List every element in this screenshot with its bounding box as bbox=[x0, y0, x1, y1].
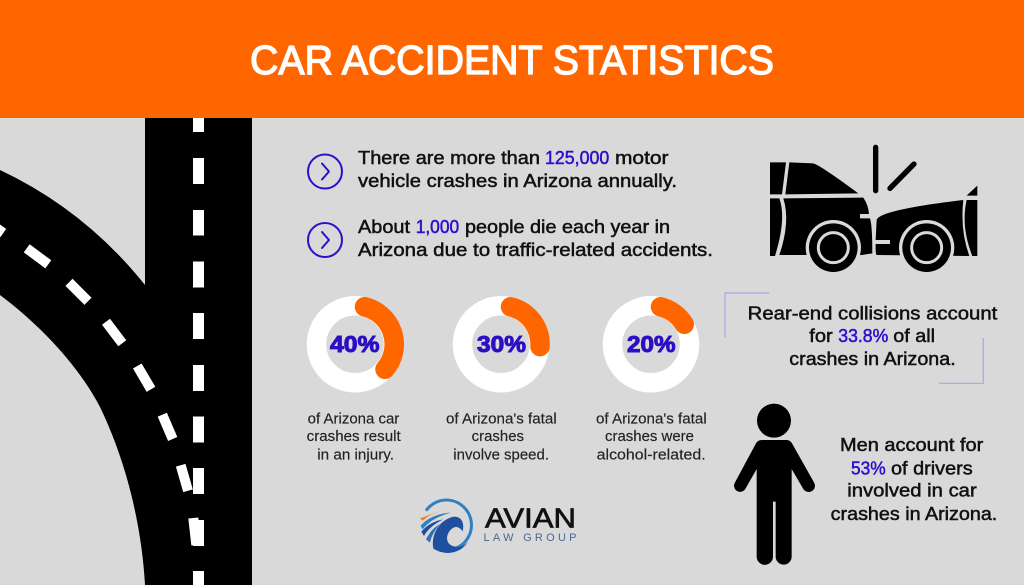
icon: chevron circle bbox=[308, 154, 342, 188]
callout: rear-end collisions: for bbox=[809, 325, 833, 346]
caption: of Arizona's fatal bbox=[596, 411, 707, 427]
logo: Avian Law Group: LAW GROUP bbox=[484, 532, 576, 544]
caption bbox=[596, 411, 707, 463]
fact: annual deaths bbox=[308, 216, 713, 260]
fact: annual crashes bbox=[308, 147, 677, 191]
caption: crashes were bbox=[605, 429, 694, 445]
caption: crashes bbox=[472, 429, 524, 445]
fact: annual deaths: 1,000 bbox=[416, 216, 459, 237]
callout: men drivers: 53% bbox=[851, 457, 886, 478]
caption: in an injury. bbox=[317, 447, 394, 463]
donut stat: 20%: 20% bbox=[627, 331, 676, 357]
callout: rear-end collisions: Rear-end collisions account bbox=[748, 302, 997, 324]
fact: annual deaths: people die each year in bbox=[465, 216, 670, 237]
donut stat: 30% bbox=[446, 306, 557, 463]
callout: men drivers: of drivers bbox=[891, 457, 973, 478]
callout: rear-end collisions: of all bbox=[893, 325, 935, 346]
callout: rear-end collisions: 33.8% bbox=[838, 325, 888, 346]
caption: crashes result bbox=[307, 429, 401, 445]
fact: annual deaths: About bbox=[358, 216, 410, 237]
callout: men drivers: involved in car bbox=[847, 480, 977, 501]
callout: men drivers: Men account for bbox=[840, 434, 983, 455]
caption: alcohol-related. bbox=[597, 447, 706, 463]
caption: of Arizona car bbox=[308, 411, 400, 427]
callout: men drivers bbox=[831, 434, 997, 524]
fact: annual crashes: 125,000 bbox=[545, 147, 609, 168]
icon: person bbox=[734, 404, 815, 565]
donut stat: 20% bbox=[596, 306, 707, 463]
icon: chevron circle bbox=[308, 223, 342, 257]
caption: of Arizona's fatal bbox=[446, 411, 557, 427]
logo: Avian Law Group: AVIAN bbox=[485, 502, 576, 534]
fact: annual crashes: vehicle crashes in Arizona annually. bbox=[358, 170, 677, 191]
donut stat: 30%: 30% bbox=[477, 331, 526, 357]
header banner bbox=[0, 0, 1024, 118]
road illustration bbox=[0, 118, 252, 585]
donut stat: 40%: 40% bbox=[330, 331, 380, 357]
callout: men drivers: crashes in Arizona. bbox=[831, 503, 997, 524]
fact: annual deaths: Arizona due to traffic-related accidents. bbox=[358, 239, 713, 260]
callout: rear-end collisions: crashes in Arizona. bbox=[789, 348, 956, 369]
caption bbox=[446, 411, 557, 463]
fact: annual crashes: motor bbox=[615, 147, 668, 168]
callout: rear-end collisions bbox=[725, 293, 997, 383]
icon: eagle emblem bbox=[420, 500, 471, 553]
donut stat: 40% bbox=[307, 306, 401, 463]
icon: car crash bbox=[770, 147, 977, 276]
title: CAR ACCIDENT STATISTICS bbox=[250, 37, 774, 83]
caption bbox=[307, 411, 401, 463]
caption: involve speed. bbox=[453, 447, 549, 463]
fact: annual crashes: There are more than bbox=[358, 147, 540, 168]
logo: Avian Law Group bbox=[420, 500, 576, 553]
